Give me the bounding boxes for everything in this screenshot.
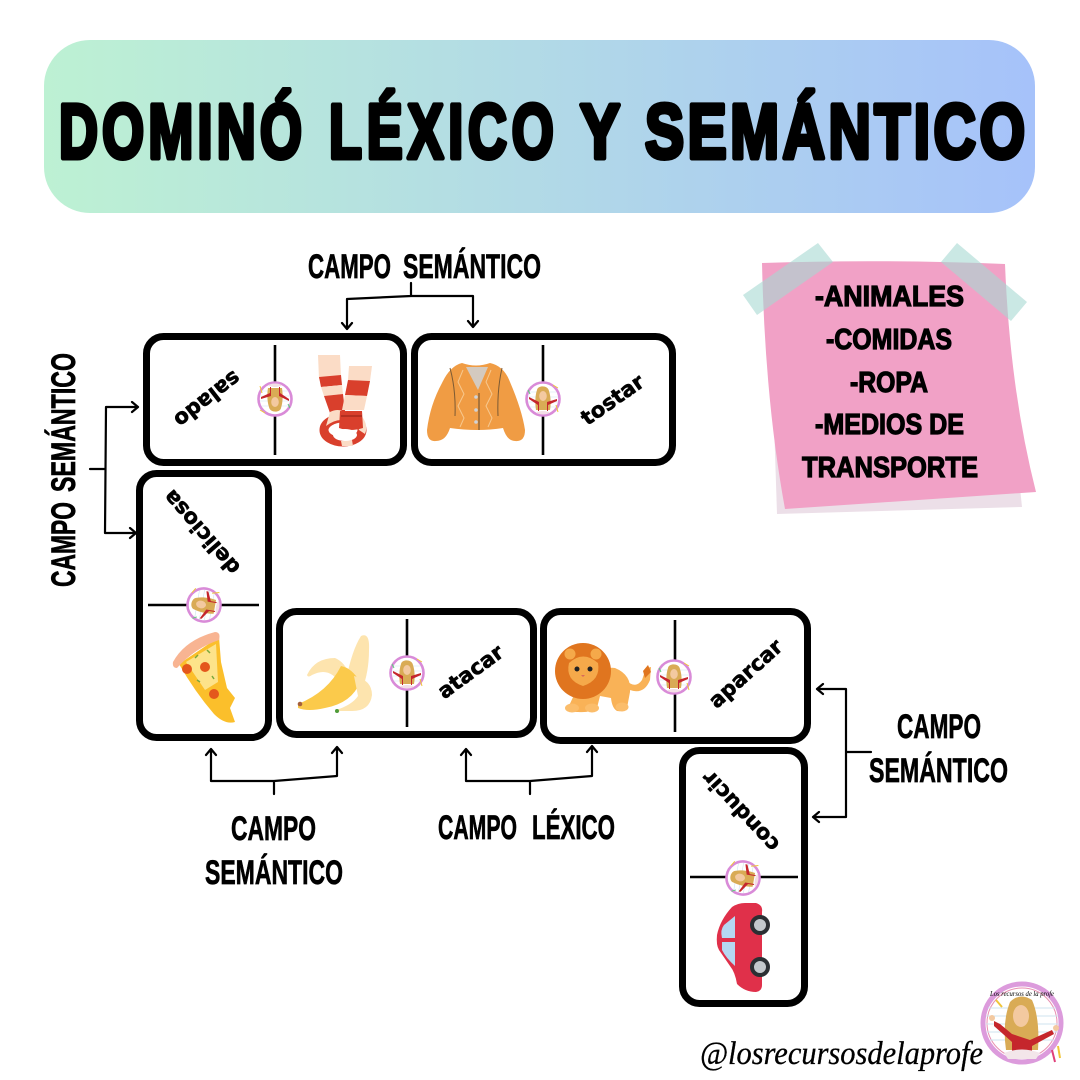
logo badge bbox=[258, 382, 292, 416]
icon: scarf bbox=[318, 355, 372, 446]
domino: salado / scarf bbox=[146, 336, 404, 462]
title: SEMÁNTICO bbox=[645, 89, 1025, 175]
domino: cardigan / tostar bbox=[414, 336, 672, 462]
title: DOMINÓ bbox=[59, 88, 302, 175]
label: campo semántico left: SEMÁNTICO bbox=[45, 353, 83, 492]
logo badge bbox=[390, 656, 424, 690]
title bbox=[59, 88, 1025, 175]
title banner bbox=[44, 40, 1035, 213]
categories list: -COMIDAS bbox=[826, 324, 952, 356]
domino: conducir / car bbox=[682, 750, 804, 1004]
icon: cardigan bbox=[427, 363, 525, 441]
sticky note: categories bbox=[743, 243, 1036, 514]
label: campo léxico: CAMPO bbox=[438, 809, 517, 847]
label: campo semántico right: CAMPO bbox=[897, 708, 981, 746]
label: campo semántico right bbox=[869, 708, 1008, 790]
categories list bbox=[802, 281, 978, 484]
bracket arrows: bottom middle bbox=[461, 746, 597, 794]
label: campo semántico bottom: SEMÁNTICO bbox=[205, 854, 343, 892]
title: LÉXICO bbox=[329, 88, 554, 175]
title: Y bbox=[580, 88, 620, 175]
logo badge bbox=[526, 382, 560, 416]
brand logo bbox=[983, 984, 1061, 1062]
logo badge bbox=[185, 586, 223, 624]
label: campo semántico top bbox=[308, 248, 541, 286]
label: campo semántico top: SEMÁNTICO bbox=[403, 248, 541, 286]
icon: car bbox=[717, 903, 768, 992]
word: salado: salado bbox=[169, 366, 245, 433]
domino: deliciosa / pizza bbox=[140, 474, 268, 738]
label: campo léxico: LÉXICO bbox=[532, 809, 615, 847]
bracket arrows: bottom left bbox=[206, 747, 342, 794]
logo badge bbox=[724, 859, 762, 897]
categories list: -ANIMALES bbox=[815, 281, 964, 313]
label: campo semántico bottom: CAMPO bbox=[231, 810, 316, 848]
label: campo semántico left bbox=[45, 353, 83, 587]
word: deliciosa: deliciosa bbox=[158, 485, 245, 580]
word: aparcar: aparcar bbox=[704, 634, 788, 713]
categories list: -ROPA bbox=[850, 367, 928, 399]
categories list: TRANSPORTE bbox=[802, 452, 978, 484]
word: atacar: atacar bbox=[433, 640, 509, 704]
icon: pizza bbox=[173, 632, 235, 723]
bracket arrows: left bbox=[90, 402, 138, 538]
icon: banana bbox=[298, 635, 372, 713]
word: tostar: tostar bbox=[576, 369, 649, 430]
domino: banana / atacar bbox=[280, 612, 534, 734]
label: campo semántico top: CAMPO bbox=[308, 248, 391, 286]
logo badge bbox=[658, 660, 690, 694]
icon: lion bbox=[555, 643, 651, 712]
word: conducir: conducir bbox=[697, 765, 784, 857]
domino: lion / aparcar bbox=[544, 612, 808, 740]
bracket arrows: top bbox=[342, 283, 478, 329]
label: campo semántico right: SEMÁNTICO bbox=[869, 752, 1008, 790]
label: campo semántico bottom bbox=[205, 810, 343, 892]
label: campo semántico left: CAMPO bbox=[45, 502, 83, 587]
brand logo: Los recursos de la profe bbox=[989, 989, 1055, 998]
categories list: -MEDIOS DE bbox=[815, 409, 964, 441]
footer handle: @losrecursosdelaprofe bbox=[700, 1036, 983, 1072]
bracket arrows: right bbox=[813, 684, 871, 822]
